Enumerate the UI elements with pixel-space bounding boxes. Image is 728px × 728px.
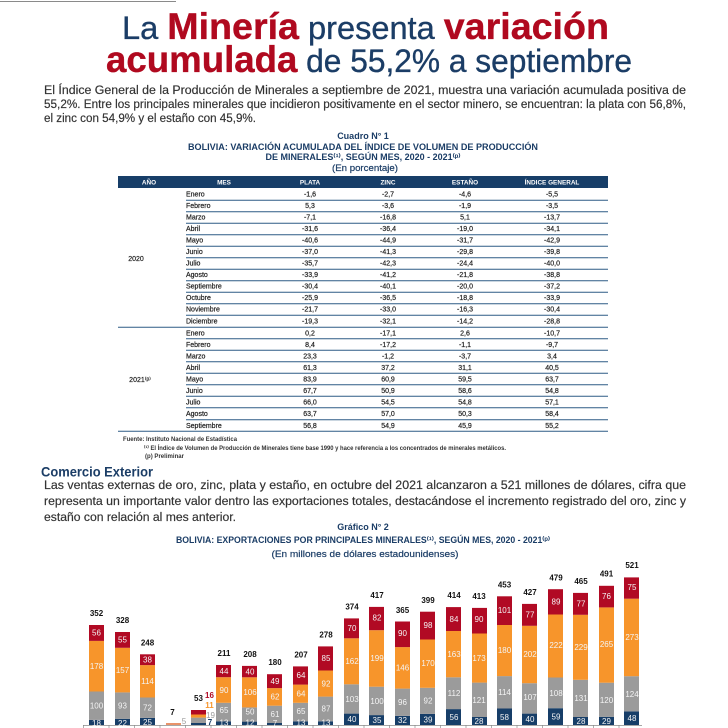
table: production index: Marzo bbox=[186, 354, 206, 360]
stacked bar chart: 173 bbox=[472, 654, 486, 663]
table: production index: Agosto bbox=[186, 272, 208, 279]
stacked bar chart: 76 bbox=[602, 592, 611, 601]
stacked bar chart: 180 bbox=[498, 646, 512, 655]
table: production index: 50,3 bbox=[458, 411, 472, 418]
stacked bar chart: 352 bbox=[90, 609, 104, 618]
table heading bbox=[188, 131, 538, 173]
text block: foreign trade: representa un importante valor dentro las exportaciones totales, destacándose el incremento registrado del oro, zinc y bbox=[44, 494, 687, 508]
stacked bar chart: 96 bbox=[398, 698, 407, 707]
stacked bar chart: 22 bbox=[118, 719, 127, 728]
table footnotes: Fuente: Instituto Nacional de Estadística bbox=[123, 436, 237, 443]
stacked bar chart: 62 bbox=[271, 692, 280, 702]
table: production index: Noviembre bbox=[186, 307, 220, 314]
table: production index: -31,6 bbox=[302, 226, 318, 233]
table: production index: -3,6 bbox=[382, 203, 394, 210]
table: production index: -19,3 bbox=[302, 319, 318, 326]
stacked bar chart: 90 bbox=[398, 629, 407, 638]
stacked bar chart: 13 bbox=[322, 718, 331, 728]
stacked bar chart: 77 bbox=[577, 600, 586, 608]
table: production index: -3,5 bbox=[546, 203, 558, 210]
table: production index: 56,8 bbox=[303, 423, 317, 430]
stacked bar chart: 157 bbox=[116, 666, 130, 675]
stacked bar chart: 207 bbox=[294, 650, 308, 660]
table: production index: 58,4 bbox=[545, 411, 559, 418]
stacked bar chart: 64 bbox=[297, 690, 306, 698]
table: production index: Agosto bbox=[186, 411, 208, 418]
table: production index: -17,2 bbox=[380, 342, 396, 349]
table: production index: 8,4 bbox=[305, 342, 315, 349]
table: production index: -17,1 bbox=[380, 330, 396, 338]
stacked bar chart: 11 bbox=[205, 701, 214, 710]
stacked bar chart: 101 bbox=[498, 606, 512, 615]
chart heading: BOLIVIA: EXPORTACIONES POR PRINCIPALES MINERALES⁽¹⁾, SEGÚN MES, 2020 - 2021⁽ᵖ⁾ bbox=[176, 534, 550, 545]
table: production index: -7,1 bbox=[304, 215, 316, 222]
stacked bar chart: 65 bbox=[220, 706, 229, 715]
table: production index: Abril bbox=[186, 226, 200, 233]
table header: MES bbox=[217, 180, 232, 186]
stacked bar chart: 273 bbox=[625, 633, 639, 642]
table: production index: 40,5 bbox=[545, 365, 559, 372]
stacked bar chart: 44 bbox=[220, 667, 229, 676]
stacked bar chart: 82 bbox=[373, 614, 382, 622]
stacked bar chart: 16 bbox=[205, 691, 214, 700]
table: production index: -35,7 bbox=[302, 261, 318, 268]
table: production index: Junio bbox=[186, 249, 203, 256]
table: production index: -31,7 bbox=[457, 238, 473, 245]
stacked bar chart: 131 bbox=[574, 694, 588, 703]
table: production index: -16,3 bbox=[457, 307, 473, 314]
stacked bar chart: 278 bbox=[319, 630, 333, 640]
table: production index: Julio bbox=[186, 261, 201, 268]
table: production index: -1,6 bbox=[304, 192, 316, 199]
stacked bar chart: 178 bbox=[90, 662, 104, 671]
table: production index: 55,2 bbox=[545, 423, 559, 430]
table: production index: Mayo bbox=[186, 376, 203, 384]
table: production index: 59,5 bbox=[458, 376, 472, 384]
table: production index: -34,1 bbox=[544, 226, 560, 233]
stacked bar chart: 25 bbox=[143, 718, 152, 727]
table: production index: -4,6 bbox=[459, 192, 471, 199]
stacked bar chart: 49 bbox=[271, 677, 280, 686]
stacked bar chart: 65 bbox=[297, 707, 306, 716]
stacked bar chart: 374 bbox=[345, 602, 359, 612]
table: production index: -37,2 bbox=[544, 284, 560, 291]
table: production index: -33,9 bbox=[302, 272, 318, 279]
stacked bar chart: 107 bbox=[523, 693, 537, 702]
table: production index: -42,9 bbox=[544, 238, 560, 245]
table header: AÑO bbox=[142, 178, 156, 186]
table: production index: Septiembre bbox=[186, 423, 222, 430]
table: production index: -21,8 bbox=[457, 272, 473, 279]
table: production index: -33,9 bbox=[544, 295, 560, 302]
stacked bar chart: 222 bbox=[549, 641, 563, 650]
table header: ESTAÑO bbox=[452, 178, 478, 186]
table: production index: -28,8 bbox=[544, 319, 560, 326]
table: production index: 83,9 bbox=[303, 376, 317, 384]
stacked bar chart: 19 bbox=[206, 711, 215, 720]
table: production index: -19,0 bbox=[457, 226, 473, 233]
stacked bar chart: 479 bbox=[549, 574, 563, 582]
intro text block bbox=[44, 82, 686, 125]
table header: ZINC bbox=[381, 180, 396, 186]
table: production index: 5,3 bbox=[305, 203, 315, 210]
stacked bar chart: 92 bbox=[322, 680, 331, 688]
stacked bar chart: 427 bbox=[523, 588, 537, 597]
table: production index: -38,8 bbox=[544, 272, 560, 279]
table header: ÍNDICE GENERAL bbox=[525, 178, 579, 186]
table: production index: 54,8 bbox=[458, 400, 472, 406]
stacked bar chart: 229 bbox=[574, 643, 588, 652]
stacked bar chart: 28 bbox=[577, 717, 586, 726]
table heading: BOLIVIA: VARIACIÓN ACUMULADA DEL ÍNDICE DE VOLUMEN DE PRODUCCIÓN bbox=[188, 141, 538, 152]
stacked bar chart: 90 bbox=[475, 615, 484, 624]
text block: foreign trade: Las ventas externas de oro, zinc, plata y estaño, en octubre del 2021 alcanzaron a 521 millones de dólares, cifra que bbox=[44, 478, 686, 492]
table: production index: -20,0 bbox=[457, 284, 473, 291]
table: production index: 54,8 bbox=[545, 388, 559, 395]
intro text block: El Índice General de la Producción de Minerales a septiembre de 2021, muestra una variación acumulada positiva de bbox=[44, 82, 686, 97]
stacked bar chart: 465 bbox=[574, 577, 588, 586]
table: production index: 57,1 bbox=[545, 400, 559, 406]
table header bbox=[118, 176, 608, 188]
stacked bar chart: 18 bbox=[92, 719, 101, 728]
table: production index: Diciembre bbox=[186, 319, 218, 326]
table: production index: -1,1 bbox=[459, 342, 471, 349]
table footnotes bbox=[123, 436, 506, 460]
stacked bar chart: 40 bbox=[246, 668, 255, 676]
intro text block: el zinc con 54,9% y el estaño con 45,9%. bbox=[44, 111, 256, 125]
table: production index: 63,7 bbox=[545, 376, 559, 384]
table: production index: -41,3 bbox=[380, 249, 396, 256]
stacked bar chart: 417 bbox=[370, 591, 384, 600]
table: production index: -13,7 bbox=[544, 215, 560, 222]
table heading: DE MINERALES⁽¹⁾, SEGÚN MES, 2020 - 2021⁽ᵖ⁾ bbox=[266, 151, 460, 162]
text block: foreign trade bbox=[44, 478, 687, 524]
stacked bar chart: 121 bbox=[472, 696, 486, 705]
table: production index: 0,2 bbox=[305, 330, 315, 338]
stacked bar chart: 365 bbox=[396, 606, 410, 615]
stacked bar chart: 112 bbox=[448, 689, 461, 698]
table footnotes: ⁽¹⁾ El Índice de Volumen de Producción de Minerales tiene base 1990 y hace referencia a los concentrados de minerales metálicos. bbox=[144, 443, 506, 452]
table: production index: 45,9 bbox=[458, 423, 472, 430]
stacked bar chart: 85 bbox=[322, 654, 331, 663]
stacked bar chart: 29 bbox=[602, 717, 611, 726]
stacked bar chart: 58 bbox=[500, 713, 509, 722]
table: production index: -30,4 bbox=[302, 284, 318, 291]
table: production index: -40,1 bbox=[380, 284, 396, 291]
table: production index: -2,7 bbox=[382, 192, 394, 199]
stacked bar chart: 56 bbox=[92, 628, 101, 638]
table: production index: Mayo bbox=[186, 238, 203, 245]
table: production index: -21,7 bbox=[302, 307, 318, 314]
year labels bbox=[128, 256, 151, 384]
table: production index: -41,2 bbox=[380, 272, 396, 279]
table: production index: 23,3 bbox=[303, 354, 317, 360]
heading: Comercio Exterior: Comercio Exterior bbox=[41, 464, 154, 480]
stacked bar chart: 100 bbox=[370, 697, 384, 706]
year labels: 2020 bbox=[128, 256, 144, 263]
chart heading bbox=[176, 522, 550, 559]
stacked bar chart: 399 bbox=[421, 596, 435, 605]
table: production index: -33,0 bbox=[380, 307, 396, 314]
stacked bar chart: 265 bbox=[600, 640, 614, 649]
table: production index: -14,2 bbox=[457, 319, 473, 326]
table: production index: 66,0 bbox=[303, 400, 317, 406]
stacked bar chart: 13 bbox=[297, 718, 306, 728]
year labels: 2021⁽ᵖ⁾ bbox=[129, 376, 151, 384]
table: production index: -39,8 bbox=[544, 249, 560, 256]
table: production index: -5,5 bbox=[546, 192, 558, 199]
stacked bar chart: 124 bbox=[625, 690, 639, 699]
table: production index: Enero bbox=[186, 192, 205, 199]
chart heading: (En millones de dólares estadounidenses) bbox=[272, 549, 458, 559]
table: production index: 3,4 bbox=[547, 354, 557, 360]
table: production index: -30,4 bbox=[544, 307, 560, 314]
stacked bar chart: 163 bbox=[447, 650, 461, 659]
table: production index: -44,9 bbox=[380, 238, 396, 245]
stacked bar chart: 413 bbox=[472, 592, 486, 601]
table heading: Cuadro N° 1 bbox=[337, 131, 389, 141]
table: production index: 50,9 bbox=[381, 388, 395, 395]
table: production index: 2,6 bbox=[460, 330, 470, 338]
stacked bar chart: 89 bbox=[552, 598, 561, 606]
stacked bar chart: 32 bbox=[398, 716, 407, 725]
table: production index: -9,7 bbox=[546, 342, 558, 349]
title: acumulada de 55,2% a septiembre bbox=[106, 39, 632, 80]
stacked bar chart: 50 bbox=[246, 708, 255, 716]
stacked bar chart: 103 bbox=[345, 695, 359, 704]
stacked bar chart: 35 bbox=[373, 716, 382, 725]
stacked bar chart: 64 bbox=[297, 671, 306, 680]
text block: foreign trade: estaño con relación al mes anterior. bbox=[44, 510, 236, 524]
table: production index: Julio bbox=[186, 400, 201, 406]
chart heading: Gráfico N° 2 bbox=[337, 522, 389, 532]
stacked bar chart bbox=[83, 561, 642, 728]
stacked bar chart: 208 bbox=[243, 650, 257, 659]
stacked bar chart: 90 bbox=[220, 686, 229, 695]
stacked bar chart: 28 bbox=[475, 717, 484, 726]
table: production index: -1,2 bbox=[382, 354, 394, 360]
stacked bar chart: 40 bbox=[526, 715, 535, 724]
stacked bar chart: 146 bbox=[396, 664, 410, 672]
table: production index: -29,8 bbox=[457, 249, 473, 256]
table: production index: 67,7 bbox=[303, 388, 317, 395]
table: production index: Octubre bbox=[186, 295, 211, 302]
stacked bar chart: 180 bbox=[268, 658, 282, 667]
stacked bar chart: 98 bbox=[424, 621, 433, 630]
table: production index bbox=[118, 176, 608, 431]
table: production index: -37,0 bbox=[302, 249, 318, 256]
table: production index: Abril bbox=[186, 365, 200, 372]
table footnotes: (p) Preliminar bbox=[145, 453, 184, 460]
stacked bar chart: 162 bbox=[345, 657, 359, 666]
stacked bar chart: 7 bbox=[273, 719, 278, 728]
stacked bar chart: 211 bbox=[218, 649, 231, 658]
stacked bar chart: 5 bbox=[182, 717, 187, 726]
table: production index: -1,9 bbox=[459, 203, 471, 210]
table: production index: 54,5 bbox=[381, 400, 395, 406]
table: production index: 60,9 bbox=[381, 376, 395, 384]
stacked bar chart: 114 bbox=[141, 677, 154, 686]
table: production index: Enero bbox=[186, 330, 205, 338]
table: production index: -16,8 bbox=[380, 215, 396, 222]
table: production index: 63,7 bbox=[303, 411, 317, 418]
stacked bar chart: 84 bbox=[450, 615, 459, 624]
table: production index: -42,3 bbox=[380, 261, 396, 268]
stacked bar chart: 77 bbox=[526, 610, 535, 620]
stacked bar chart: 72 bbox=[143, 704, 152, 712]
stacked bar chart: 40 bbox=[348, 715, 357, 724]
stacked bar chart: 414 bbox=[447, 591, 461, 600]
table: production index: -36,5 bbox=[380, 295, 396, 302]
table: production index: -36,4 bbox=[380, 226, 396, 233]
stacked bar chart: 87 bbox=[322, 704, 331, 714]
stacked bar chart: 491 bbox=[600, 570, 614, 578]
stacked bar chart: 120 bbox=[600, 696, 614, 705]
stacked bar chart: 75 bbox=[628, 583, 637, 592]
table: production index: Septiembre bbox=[186, 284, 222, 291]
table: production index: -25,9 bbox=[302, 295, 318, 302]
intro text block: 55,2%. Entre los principales minerales que incidieron positivamente en el sector minero, se encuentran: la plata con 56,8%, bbox=[44, 97, 686, 111]
stacked bar chart: 48 bbox=[628, 714, 637, 723]
stacked bar chart: 56 bbox=[450, 713, 459, 722]
table: production index: -24,4 bbox=[457, 261, 473, 268]
table: production index: Junio bbox=[186, 388, 203, 395]
stacked bar chart: 12 bbox=[246, 718, 255, 728]
table header: PLATA bbox=[300, 180, 321, 186]
stacked bar chart: 55 bbox=[118, 636, 127, 644]
stacked bar chart: 70 bbox=[348, 624, 357, 633]
table: production index: -10,7 bbox=[544, 330, 560, 338]
stacked bar chart: 453 bbox=[498, 580, 512, 590]
table: production index: 54,9 bbox=[381, 423, 395, 430]
stacked bar chart: 248 bbox=[141, 638, 155, 648]
stacked bar chart: 7 bbox=[170, 708, 175, 717]
stacked bar chart: 38 bbox=[143, 656, 152, 664]
table: production index: -40,0 bbox=[544, 261, 560, 268]
table: production index: 58,6 bbox=[458, 388, 472, 395]
table: production index: -18,8 bbox=[457, 295, 473, 302]
stacked bar chart: 93 bbox=[118, 702, 127, 710]
stacked bar chart: 199 bbox=[370, 654, 384, 663]
stacked bar chart: 39 bbox=[424, 716, 433, 724]
title: La Minería presenta variación bbox=[122, 6, 609, 47]
table: production index: -3,7 bbox=[459, 354, 471, 360]
table: production index: -32,1 bbox=[380, 319, 396, 326]
stacked bar chart: 59 bbox=[552, 712, 561, 722]
table: production index: 57,0 bbox=[381, 411, 395, 418]
stacked bar chart: 61 bbox=[271, 710, 280, 719]
table: production index: 31,1 bbox=[458, 365, 472, 372]
stacked bar chart: 328 bbox=[116, 616, 130, 625]
stacked bar chart: 202 bbox=[523, 650, 537, 659]
stacked bar chart: 108 bbox=[549, 689, 563, 698]
stacked bar chart: 92 bbox=[424, 696, 433, 706]
table: production index: Febrero bbox=[186, 203, 211, 210]
stacked bar chart: 114 bbox=[498, 688, 511, 697]
stacked bar chart: 7 bbox=[208, 718, 213, 727]
stacked bar chart: 106 bbox=[243, 688, 257, 697]
title bbox=[106, 6, 632, 80]
stacked bar chart: 53 bbox=[194, 694, 203, 703]
stacked bar chart: 100 bbox=[90, 702, 104, 710]
table: production index: -40,6 bbox=[302, 238, 318, 245]
stacked bar chart: 521 bbox=[625, 561, 639, 570]
stacked bar chart: 170 bbox=[421, 659, 435, 668]
stacked bar chart: 13 bbox=[220, 718, 229, 728]
table: production index: Marzo bbox=[186, 215, 206, 222]
table: production index: 5,1 bbox=[460, 215, 470, 222]
table heading: (En porcentaje) bbox=[332, 163, 398, 173]
table: production index: 37,2 bbox=[381, 365, 395, 372]
table: production index: Febrero bbox=[186, 342, 211, 349]
table: production index: 61,3 bbox=[303, 365, 317, 372]
